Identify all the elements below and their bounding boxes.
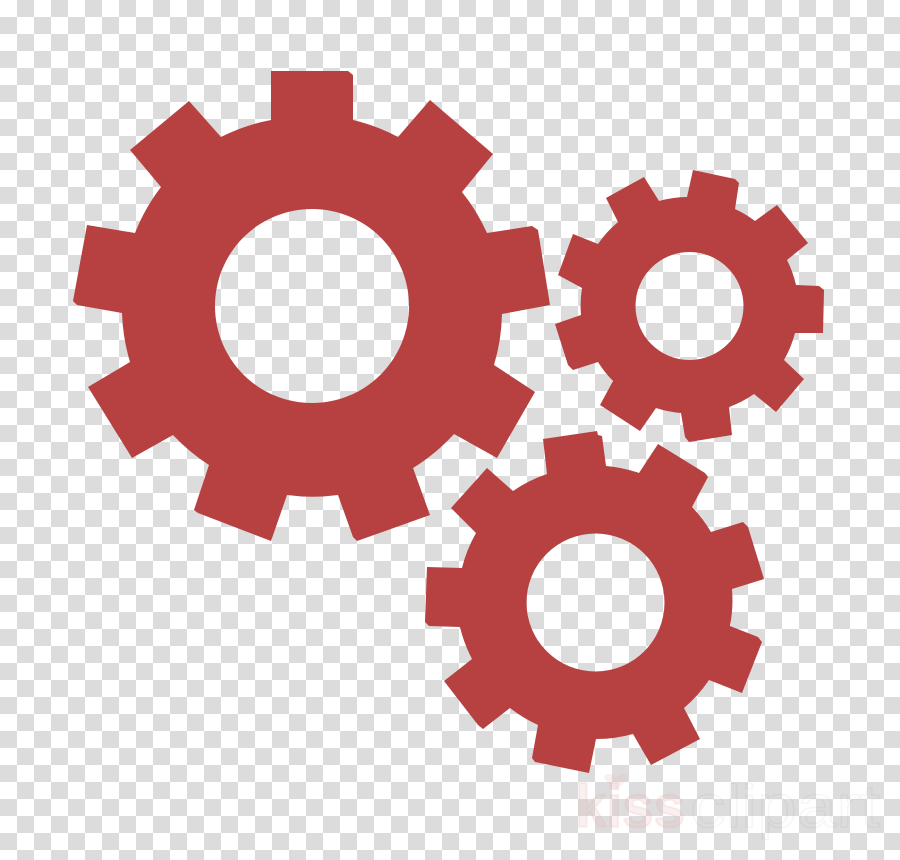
icon: medium gear — [425, 431, 764, 773]
watermark: kiss — [575, 773, 685, 840]
icon: small gear — [555, 170, 824, 442]
watermark — [575, 773, 880, 840]
watermark: clipart — [690, 773, 880, 840]
icon: large gear — [73, 71, 550, 541]
